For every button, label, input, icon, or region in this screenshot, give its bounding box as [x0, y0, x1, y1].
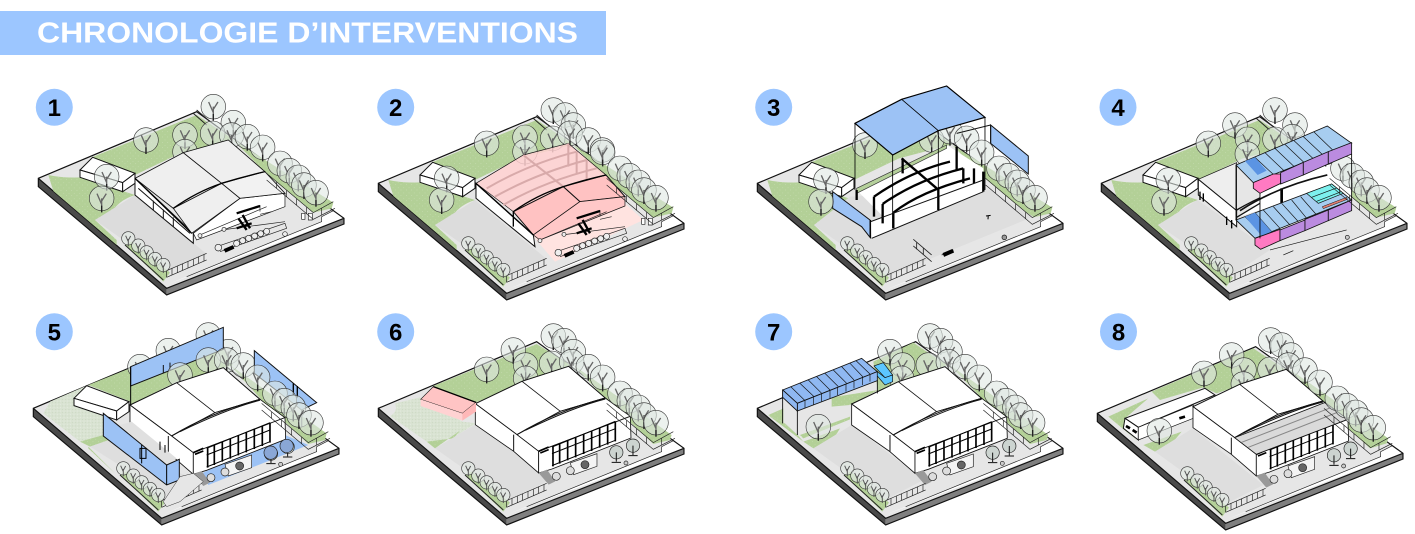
panel: step 1: 1 — [48, 95, 61, 122]
panel: step 5: 5 — [48, 320, 61, 346]
panel: step 2: 2 — [389, 95, 402, 122]
panel: step 6: 6 — [389, 320, 402, 346]
panel: step 4: 4 — [1111, 95, 1125, 122]
title banner: CHRONOLOGIE D’INTERVENTIONS — [37, 18, 578, 50]
panel: step 3 — [755, 86, 1063, 300]
panel: step 5 — [33, 313, 339, 525]
title banner — [0, 11, 606, 55]
panel: step 7 — [755, 313, 1063, 525]
panel: step 6 — [377, 313, 684, 525]
panel: step 1 — [36, 89, 344, 295]
panel: step 2 — [377, 89, 684, 300]
panel: step 8 — [1097, 313, 1403, 530]
panel: step 7: 7 — [767, 320, 780, 346]
panel: step 3: 3 — [767, 95, 780, 122]
panel: step 8: 8 — [1112, 320, 1125, 346]
panel: step 4 — [1100, 89, 1407, 300]
